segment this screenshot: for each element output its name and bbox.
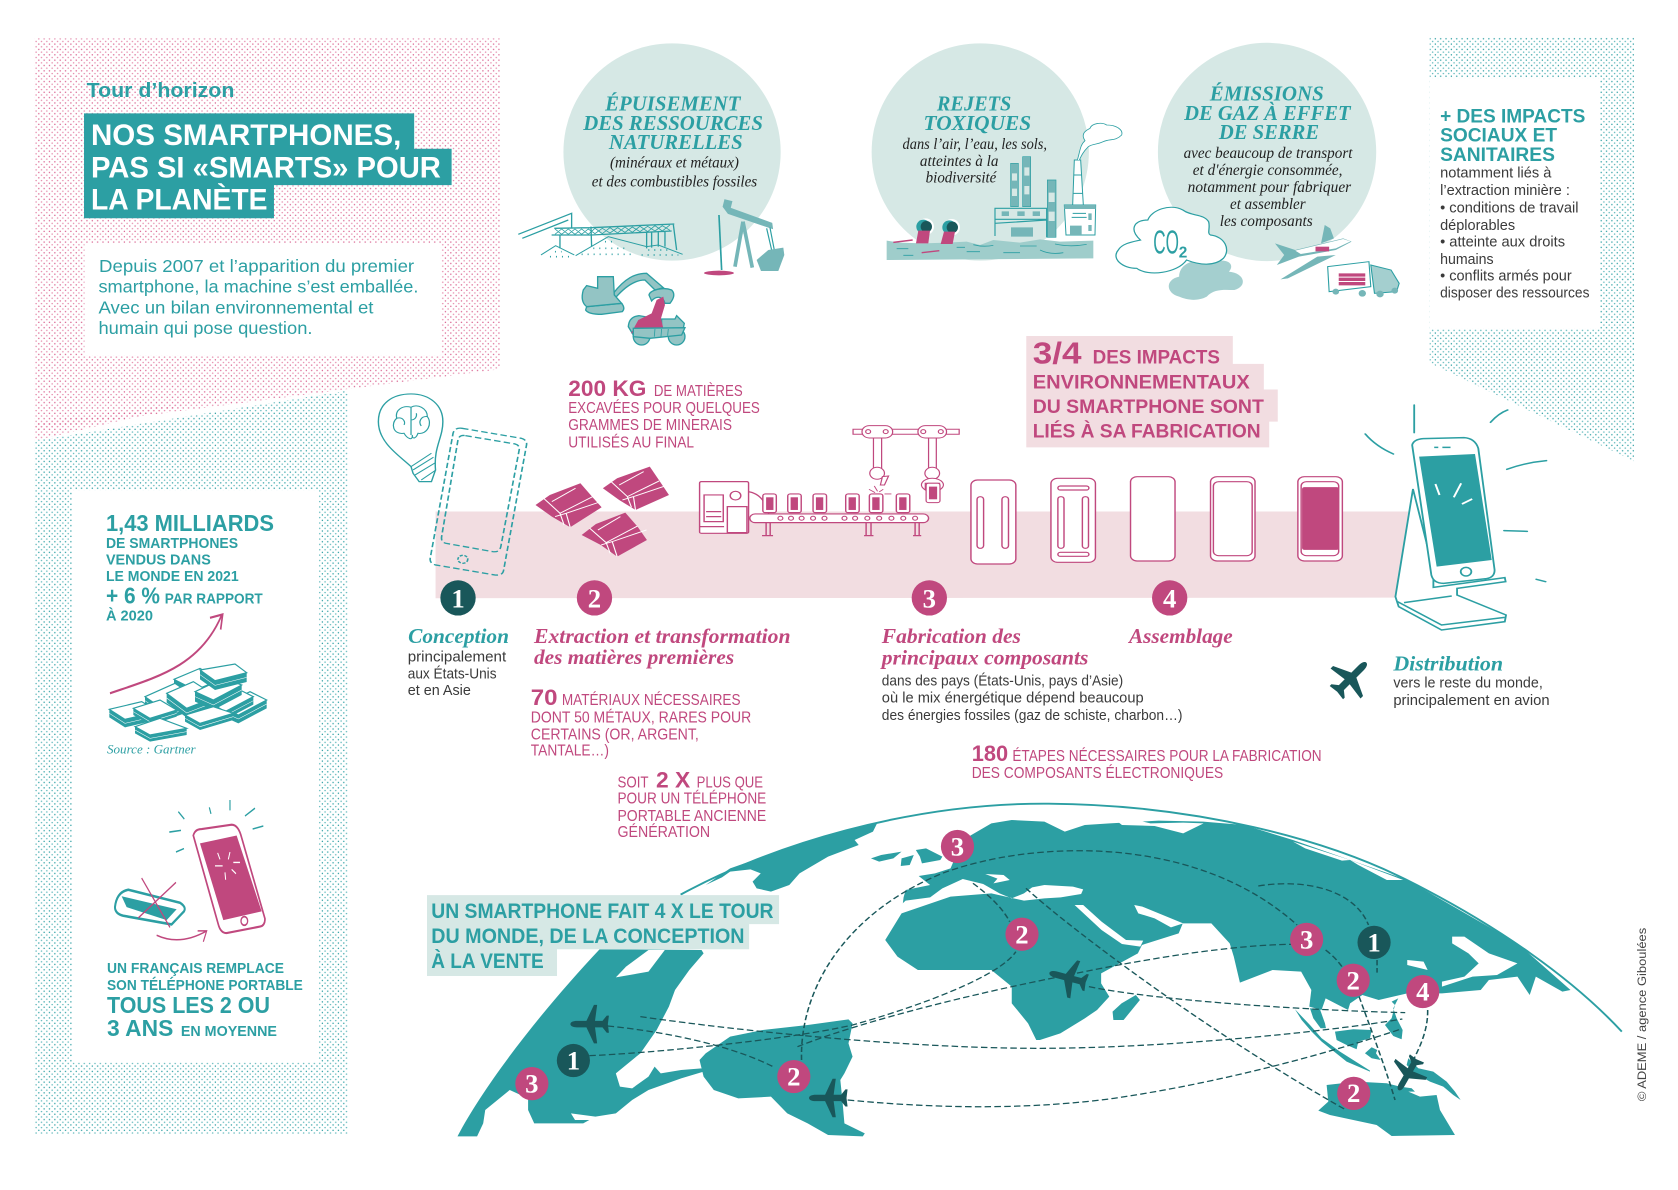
panel: title and introduction <box>84 80 452 355</box>
stat text <box>617 775 766 841</box>
number badge: 3 <box>923 583 936 613</box>
intro text: humain qui pose question. <box>98 318 312 338</box>
badge 3 North America <box>515 1067 548 1100</box>
circle <box>1158 43 1376 261</box>
text list <box>1440 166 1589 301</box>
stat text: DE MATIÈRES <box>654 383 743 400</box>
icon: plane over Australia <box>1383 1049 1433 1099</box>
icon: factory and polluted water <box>887 123 1122 260</box>
intro text: Depuis 2007 et l’apparition du premier <box>99 256 414 276</box>
heading: SOCIAUX ET <box>1440 125 1557 147</box>
icon: phone stacks <box>109 664 267 742</box>
stat text: PORTABLE ANCIENNE <box>617 808 766 825</box>
callout text: UN SMARTPHONE FAIT 4 X LE TOUR <box>431 899 774 923</box>
icon: clouds, plane, truck <box>1116 207 1399 300</box>
heading: Distribution <box>1392 652 1503 676</box>
icon label: CO2 <box>1153 224 1187 261</box>
step phone 5 <box>1298 477 1342 561</box>
text: où le mix énergétique dépend beaucoup <box>882 691 1144 707</box>
badge 1 Asia <box>1357 926 1391 959</box>
text: des énergies fossiles (gaz de schiste, charbon…) <box>882 708 1182 724</box>
heading: DES RESSOURCES <box>582 111 763 135</box>
stat text: DES COMPOSANTS ÉLECTRONIQUES <box>972 765 1223 782</box>
badge 2 South America: 2 <box>787 1062 801 1092</box>
description: avec beaucoup de transport <box>1184 145 1353 162</box>
text <box>882 673 1182 724</box>
badge 1 North America: 1 <box>567 1046 580 1076</box>
heading: + DES IMPACTS <box>1440 106 1585 128</box>
heading: DE SERRE <box>1218 120 1319 144</box>
stat text: PLUS QUE <box>697 775 763 792</box>
heading <box>880 624 1088 670</box>
text list: notamment liés à <box>1440 166 1552 182</box>
stat text: DONT 50 MÉTAUX, RARES POUR <box>531 709 751 726</box>
panel: greenhouse gas emissions <box>1116 43 1399 300</box>
callout text <box>1033 336 1264 443</box>
stat: 200 kg excavated <box>568 376 760 451</box>
callout: four times around the world <box>427 895 779 976</box>
world map: globe with routes <box>457 804 1622 1136</box>
icon: phone replacement <box>115 800 265 942</box>
southeast Asia islands and Australia <box>1295 998 1461 1136</box>
white box <box>72 490 319 1063</box>
replacement stat: 3 ANS <box>107 1015 173 1041</box>
sales stat: + 6 % <box>106 583 160 609</box>
sales stat: PAR RAPPORT <box>165 592 263 608</box>
heading <box>924 92 1031 135</box>
icon: mine, pump, excavator <box>518 200 784 345</box>
badge 2 Asia <box>1337 964 1370 997</box>
number badge: 1 <box>451 583 465 613</box>
heading: Fabrication des <box>881 624 1021 648</box>
stat: 180 steps <box>972 741 1322 782</box>
big number: 200 KG <box>568 376 646 401</box>
callout text: DU SMARTPHONE SONT <box>1033 397 1264 418</box>
icon label: CO2: CO <box>1153 224 1179 261</box>
text: principalement <box>408 649 506 665</box>
big number: 180 <box>972 741 1008 766</box>
routes <box>589 851 1428 1110</box>
text list: l’extraction minière : <box>1440 183 1570 199</box>
text list: déplorables <box>1440 218 1515 234</box>
circle <box>872 43 1089 261</box>
seas and lakes <box>616 811 1517 987</box>
icons: phone assembly steps <box>971 477 1342 564</box>
map badges <box>515 830 1439 1110</box>
badge 2 Australia: 2 <box>1347 1078 1360 1108</box>
text <box>1393 676 1550 709</box>
callout text: LIÉS À SA FABRICATION <box>1033 421 1261 443</box>
icon: metal ingots and assembly line <box>536 426 959 557</box>
text list: • conditions de travail <box>1440 201 1578 217</box>
callout text: À LA VENTE <box>431 948 544 973</box>
callout text: DES IMPACTS <box>1093 347 1220 368</box>
kicker: Tour d’horizon <box>87 80 234 102</box>
number badge <box>912 580 947 616</box>
description: et assembler <box>1230 196 1307 213</box>
step 4: assembly <box>1127 580 1233 648</box>
badge 2 Africa: 2 <box>1015 919 1029 949</box>
step phone 1 <box>971 480 1016 564</box>
replacement stat: EN MOYENNE <box>181 1024 277 1040</box>
step 2: extraction <box>533 580 791 669</box>
sales stat: 1,43 MILLIARDS <box>106 510 274 536</box>
text: vers le reste du monde, <box>1393 676 1543 692</box>
heading: des matières premières <box>534 645 734 669</box>
badge 2 Australia <box>1337 1077 1370 1110</box>
text: principalement en avion <box>1393 693 1550 709</box>
text <box>408 649 506 699</box>
heading: DE GAZ À EFFET <box>1183 101 1351 125</box>
description <box>1184 145 1353 230</box>
text list: humains <box>1440 252 1494 268</box>
stat text <box>531 692 751 760</box>
description: les composants <box>1220 213 1313 230</box>
heading: ÉMISSIONS <box>1209 82 1324 106</box>
icon: plane over South America <box>809 1079 848 1117</box>
heading: Conception <box>408 624 509 648</box>
badge 4 Asia <box>1406 975 1439 1008</box>
badge 3 North America: 3 <box>525 1069 539 1099</box>
number badge: 4 <box>1163 583 1176 613</box>
step 1: conception <box>408 580 509 699</box>
text: aux États-Unis <box>408 665 497 682</box>
panel: sales and replacement figures <box>72 490 319 1063</box>
heading: principaux composants <box>880 646 1088 670</box>
replacement stat: TOUS LES 2 OU <box>107 992 270 1018</box>
title <box>91 119 441 217</box>
stat text: MATÉRIAUX NÉCESSAIRES <box>562 692 741 709</box>
stat text: CERTAINS (OR, ARGENT, <box>531 726 699 743</box>
description: notamment pour fabriquer <box>1188 179 1352 196</box>
stat text: POUR UN TÉLÉPHONE <box>617 791 766 808</box>
heading: NATURELLES <box>608 130 743 154</box>
sales stat: DE SMARTPHONES <box>106 536 238 552</box>
badge 2 Asia: 2 <box>1347 965 1360 995</box>
stat text <box>972 748 1322 782</box>
badge 2 Africa <box>1005 918 1039 951</box>
stat text: EXCAVÉES POUR QUELQUES <box>568 400 760 417</box>
description <box>592 155 757 191</box>
heading: SANITAIRES <box>1440 144 1555 166</box>
heading: REJETS <box>936 92 1011 116</box>
background: pink dotted panel <box>34 39 500 430</box>
callout text: DU MONDE, DE LA CONCEPTION <box>431 924 745 948</box>
source: Source : Gartner <box>107 742 197 756</box>
description: dans l’air, l’eau, les sols, <box>903 136 1047 153</box>
white box <box>1430 78 1600 329</box>
panel: resource depletion <box>518 43 784 345</box>
callout text <box>431 899 774 973</box>
replacement stat <box>107 961 303 1041</box>
number badge <box>577 580 612 616</box>
sales stat <box>106 510 274 625</box>
panel: social and health impacts <box>1430 78 1600 329</box>
title: LA PLANÈTE <box>91 183 268 217</box>
heading: TOXIQUES <box>924 111 1031 135</box>
icon: idea bulb and dashed phone <box>378 394 527 575</box>
description: biodiversité <box>926 170 997 187</box>
badge 1 Asia: 1 <box>1367 927 1381 957</box>
badge 3 Asia <box>1290 923 1323 956</box>
badge 2 South America <box>777 1060 810 1093</box>
stat text: ÉTAPES NÉCESSAIRES POUR LA FABRICATION <box>1012 748 1322 765</box>
description: atteintes à la <box>920 153 999 170</box>
stat text <box>568 383 760 451</box>
title: PAS SI «SMARTS» POUR <box>91 152 441 185</box>
intro box <box>85 243 441 355</box>
number badge: 2 <box>588 583 601 613</box>
callout text: 3/4 <box>1033 336 1082 370</box>
badge 3 Europe: 3 <box>951 832 964 862</box>
text: dans des pays (États-Unis, pays d’Asie) <box>882 673 1123 690</box>
text list: disposer des ressources <box>1440 285 1589 301</box>
big number: 70 <box>531 685 558 710</box>
sales stat: À 2020 <box>106 608 153 625</box>
icon label: CO2: 2 <box>1179 243 1187 261</box>
description: et des combustibles fossiles <box>592 174 757 191</box>
text: et en Asie <box>408 683 471 699</box>
icon: plane <box>1321 648 1381 708</box>
heading <box>582 92 763 154</box>
background: teal dotted panel <box>34 391 348 1134</box>
callout text: ENVIRONNEMENTAUX <box>1033 372 1250 393</box>
stat text: SOIT <box>617 775 649 792</box>
stat text: GÉNÉRATION <box>617 824 710 841</box>
stat text: UTILISÉS AU FINAL <box>568 434 694 451</box>
background: pink dots over teal junction <box>34 401 203 441</box>
circle <box>563 43 781 261</box>
band: life cycle timeline <box>436 512 1408 598</box>
credit: © ADEME / agence Giboulées <box>1635 928 1649 1101</box>
step phone 2 <box>1051 478 1095 562</box>
icon: plane over North America <box>570 1005 609 1043</box>
badge 1 North America <box>557 1044 590 1077</box>
badge 3 Asia: 3 <box>1300 924 1313 954</box>
continents <box>457 820 1571 1136</box>
icon: growth arrow <box>110 614 223 693</box>
badge 4 Asia: 4 <box>1416 977 1429 1007</box>
panel: toxic releases <box>872 43 1122 261</box>
badge 3 Europe <box>941 830 974 863</box>
big number: 2 X <box>656 768 690 793</box>
stat: 70 materials <box>531 685 751 760</box>
text list: • conflits armés pour <box>1440 269 1572 285</box>
stat: 2x more <box>617 768 766 841</box>
heading: Extraction et transformation <box>533 624 791 648</box>
intro text <box>98 256 418 338</box>
stat text: GRAMMES DE MINERAIS <box>568 417 732 434</box>
replacement stat: UN FRANÇAIS REMPLACE <box>107 961 284 977</box>
description: (minéraux et métaux) <box>610 155 739 172</box>
heading: ÉPUISEMENT <box>604 92 741 116</box>
heading <box>1440 106 1585 166</box>
description <box>903 136 1047 187</box>
globe outline arc <box>681 804 1622 1032</box>
callout background <box>1026 336 1278 447</box>
heading <box>1183 82 1351 144</box>
callout background <box>427 895 779 976</box>
title: NOS SMARTPHONES, <box>91 119 401 152</box>
icon: plane over Africa <box>1044 954 1092 1001</box>
step phone 4 <box>1211 477 1255 561</box>
heading: Assemblage <box>1127 624 1233 648</box>
heading <box>533 624 791 669</box>
step phone 3 <box>1131 477 1175 561</box>
replacement stat: SON TÉLÉPHONE PORTABLE <box>107 977 303 994</box>
callout: 3/4 of impacts <box>1026 336 1278 447</box>
stat text: TANTALE…) <box>531 743 609 760</box>
sales stat: LE MONDE EN 2021 <box>106 569 239 585</box>
icon: phone on stand <box>1365 405 1546 630</box>
intro text: smartphone, la machine s’est emballée. <box>98 277 418 297</box>
intro text: Avec un bilan environnemental et <box>98 298 374 318</box>
description: et d'énergie consommée, <box>1193 162 1343 179</box>
background: teal dotted panel right <box>1430 37 1634 461</box>
sales stat: VENDUS DANS <box>106 553 211 569</box>
title backgrounds <box>84 113 452 218</box>
distribution <box>1321 648 1550 709</box>
text list: • atteinte aux droits <box>1440 235 1565 251</box>
step 3: component manufacturing <box>880 580 1182 724</box>
